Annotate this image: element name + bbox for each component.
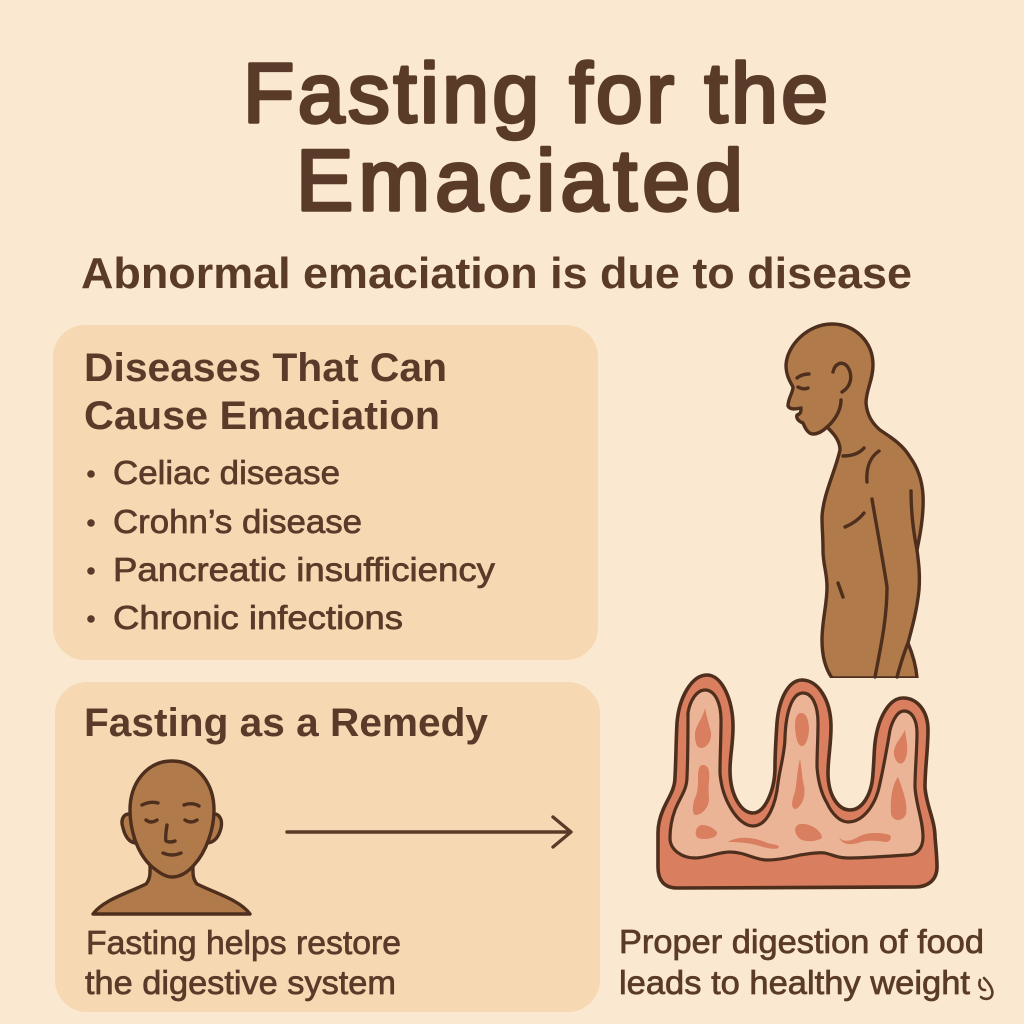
icon: calm face with closed eyes	[93, 761, 250, 914]
subtitle: Abnormal emaciation is due to disease	[81, 249, 912, 298]
caption: fasting helps: the digestive system	[85, 964, 396, 1001]
title: Fasting for the	[243, 46, 828, 140]
caption: fasting helps: Fasting helps restore	[86, 924, 401, 961]
icon: intestinal villi cross-section	[658, 675, 937, 888]
disease list: Chronic infections	[113, 599, 403, 636]
arrow	[287, 817, 571, 847]
caption: fasting helps	[85, 924, 401, 1001]
disease list: Celiac disease	[113, 454, 340, 491]
panel heading: Diseases That Can	[84, 346, 447, 390]
panel heading	[84, 346, 447, 438]
disease list: Pancreatic insufficiency	[113, 551, 496, 588]
disease list	[87, 454, 496, 636]
villi blood vessels	[693, 708, 907, 849]
title	[243, 46, 828, 229]
title: Emaciated	[296, 133, 743, 229]
panel heading: Fasting as a Remedy	[84, 701, 489, 745]
panel: diseases that can cause emaciation	[53, 325, 598, 660]
caption: proper digestion: Proper digestion of food	[619, 923, 984, 960]
disease list: Crohn’s disease	[113, 503, 362, 540]
panel heading: Cause Emaciation	[84, 394, 440, 438]
icon: emaciated figure in profile	[786, 324, 923, 683]
icon: small drop mark	[979, 978, 992, 999]
panel: fasting as a remedy	[55, 682, 600, 1012]
caption: proper digestion	[619, 923, 984, 1001]
caption: proper digestion: leads to healthy weight	[619, 964, 970, 1001]
